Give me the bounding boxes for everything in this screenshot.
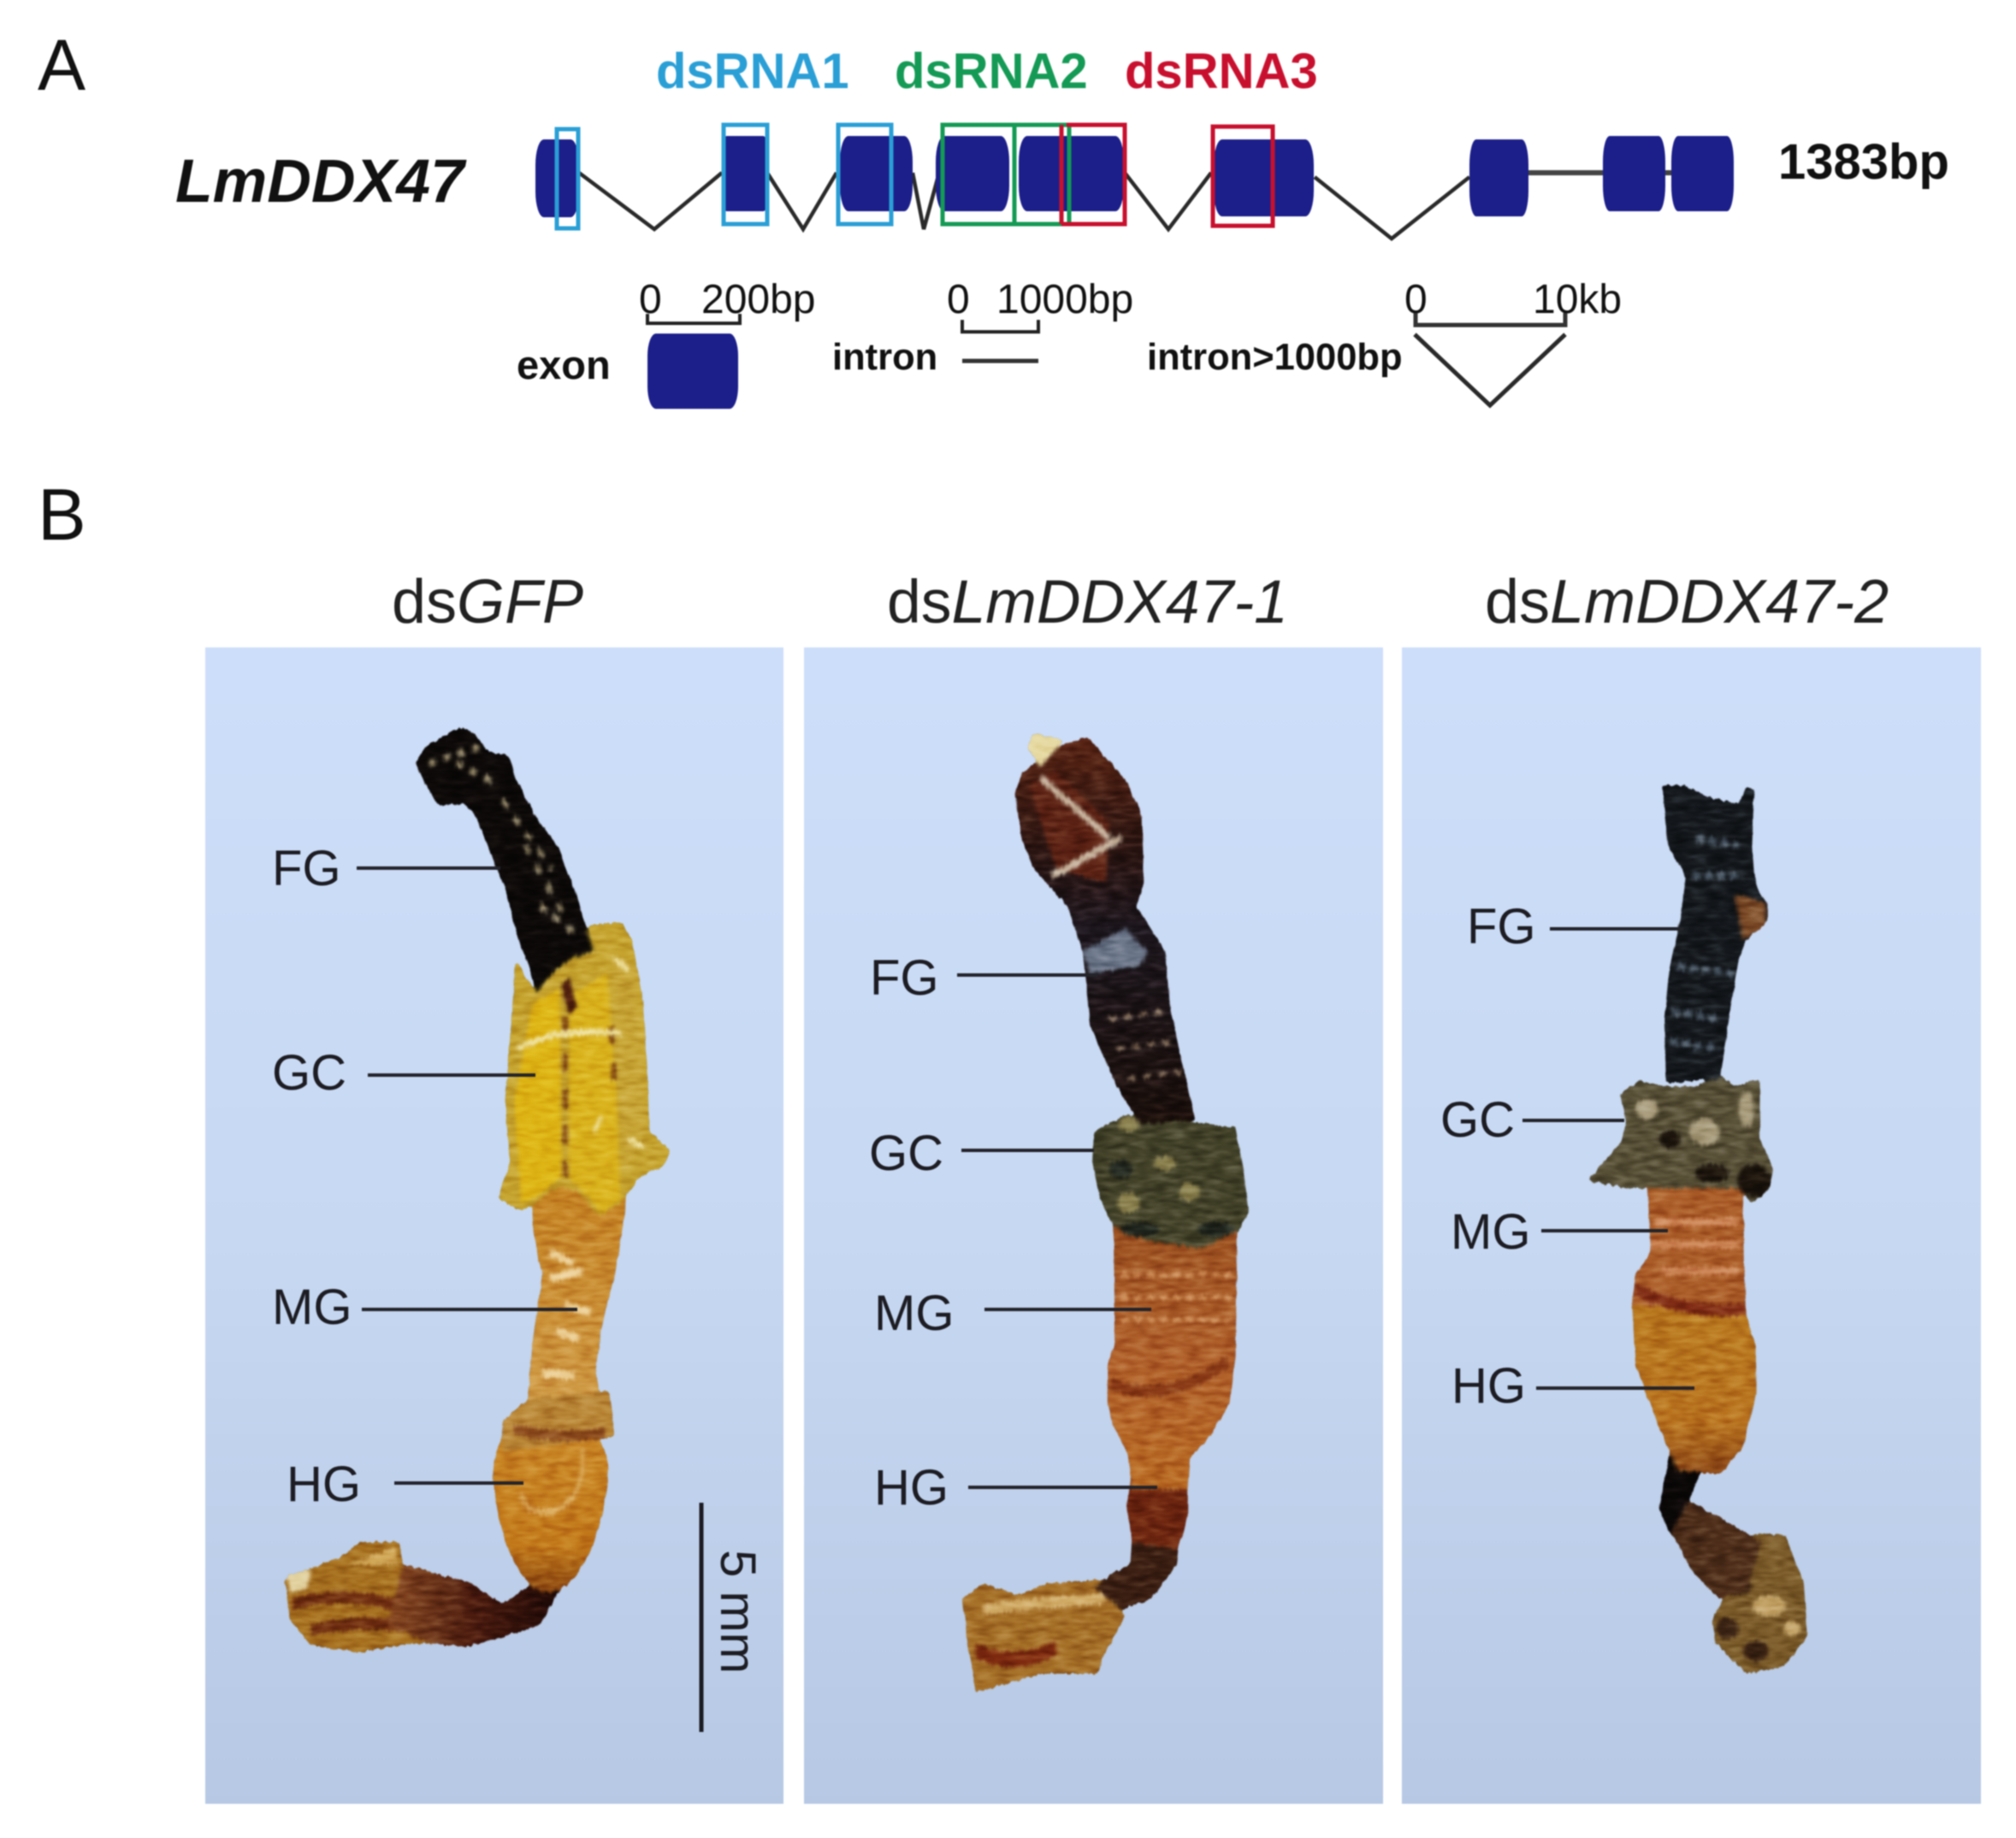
rectum xyxy=(962,1580,1125,1693)
total length: 1383bp xyxy=(1778,134,1949,190)
specimen: dsLmDDX47-2 gut xyxy=(1588,785,1807,1674)
legend: intron scale: intron xyxy=(832,337,937,378)
part labels: dsLmDDX47-2: FG xyxy=(1467,899,1536,954)
gastric caeca xyxy=(1092,1115,1249,1249)
midgut and hindgut xyxy=(1108,1207,1238,1489)
tail xyxy=(1094,1531,1180,1610)
heading: dsGFP: dsGFP xyxy=(392,568,583,636)
dsRNA2 target boxes xyxy=(943,125,1069,224)
hindgut xyxy=(1632,1297,1756,1475)
exons xyxy=(535,136,1734,217)
scale bar xyxy=(700,1503,703,1732)
legend: intron scale xyxy=(832,277,1133,378)
rectum xyxy=(285,1542,464,1652)
legend: long intron scale xyxy=(1147,277,1622,405)
foregut xyxy=(415,727,594,992)
part labels: dsLmDDX47-1: HG xyxy=(874,1460,949,1516)
legend: exon scale: 200bp xyxy=(701,277,815,322)
dsRNA legend labels: dsRNA3 xyxy=(1125,44,1318,99)
dsRNA3 target boxes xyxy=(1061,125,1273,226)
introns xyxy=(579,173,1671,239)
heading: dsLmDDX47-1: dsLmDDX47-1 xyxy=(887,568,1288,636)
part labels: dsLmDDX47-1: MG xyxy=(874,1285,954,1341)
part labels: dsLmDDX47-2: GC xyxy=(1440,1092,1515,1148)
dsRNA legend labels xyxy=(656,44,1318,99)
gastric caeca xyxy=(1588,1075,1773,1203)
foregut xyxy=(1015,736,1196,1124)
legend: long intron scale: 10kb xyxy=(1533,277,1622,322)
part labels: dsLmDDX47-2: HG xyxy=(1451,1358,1526,1414)
gene name: LmDDX47 xyxy=(175,147,467,216)
part labels: dsLmDDX47-1 xyxy=(869,950,954,1516)
dsRNA legend labels: dsRNA1 xyxy=(656,44,849,99)
part labels: dsLmDDX47-1: GC xyxy=(869,1126,943,1181)
panel label B: B xyxy=(38,475,86,556)
legend: exon scale: 0 xyxy=(639,277,662,322)
part labels: dsGFP: FG xyxy=(272,841,341,896)
tail xyxy=(1663,1500,1762,1599)
legend: exon scale xyxy=(517,277,815,409)
panel: dsGFP photo xyxy=(205,647,783,1804)
specimen: dsGFP gut xyxy=(285,727,671,1652)
specimen: dsLmDDX47-1 gut xyxy=(962,733,1249,1693)
legend: long intron scale: intron>1000bp xyxy=(1147,337,1403,378)
panel label A: A xyxy=(38,25,86,105)
legend: intron scale: 1000bp xyxy=(996,277,1133,322)
midgut xyxy=(527,1177,626,1406)
panel: dsLmDDX47-2 photo xyxy=(1402,647,1981,1804)
part labels: dsLmDDX47-1: FG xyxy=(870,950,939,1006)
part labels: dsLmDDX47-2 xyxy=(1440,899,1536,1414)
heading: dsLmDDX47-2: dsLmDDX47-2 xyxy=(1485,568,1889,636)
legend: long intron scale: 0 xyxy=(1404,277,1428,322)
part labels: dsGFP: HG xyxy=(287,1457,361,1512)
legend: intron scale: 0 xyxy=(947,277,970,322)
leader lines: dsGFP xyxy=(357,868,577,1483)
valve band xyxy=(502,1392,615,1451)
foregut xyxy=(1663,785,1767,1083)
lower hindgut xyxy=(1126,1470,1188,1550)
dsRNA1 target boxes xyxy=(557,125,891,228)
leader lines: dsLmDDX47-1 xyxy=(957,975,1157,1487)
panel A: gene structure xyxy=(175,44,1949,239)
hindgut xyxy=(493,1410,608,1592)
tail xyxy=(387,1564,564,1647)
panel: dsLmDDX47-1 photo xyxy=(804,647,1383,1804)
part labels: dsLmDDX47-2: MG xyxy=(1451,1204,1530,1260)
scale label: 5 mm xyxy=(710,1550,766,1674)
legend: exon scale: exon xyxy=(517,342,611,387)
part labels: dsGFP: MG xyxy=(272,1280,352,1335)
leader lines: dsLmDDX47-2 xyxy=(1522,929,1694,1388)
dsRNA legend labels: dsRNA2 xyxy=(895,44,1088,99)
part labels: dsGFP xyxy=(272,841,361,1512)
midgut xyxy=(1632,1177,1747,1316)
part labels: dsGFP: GC xyxy=(272,1045,346,1101)
gastric caeca xyxy=(499,923,671,1214)
rectum xyxy=(1712,1534,1807,1674)
